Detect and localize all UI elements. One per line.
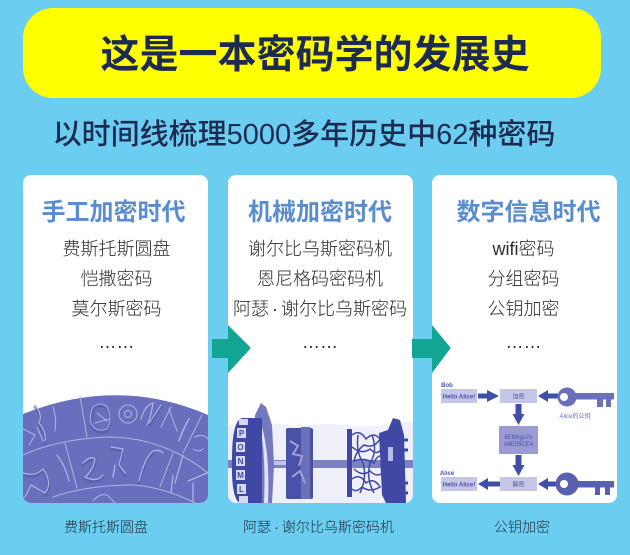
list: mechanical ciphers: 阿瑟·谢尔比乌斯密码: [233, 299, 407, 319]
diagram: public key encryption flow: Alice: [440, 471, 455, 477]
diagram: public key encryption flow: 6Ellt6gs7o: [504, 435, 533, 441]
image: Scherbius cipher machine: [228, 403, 413, 503]
image: Scherbius cipher machine: O: [237, 443, 243, 452]
list: mechanical ciphers: ……: [302, 332, 338, 352]
arrow: mechanical to digital: [412, 325, 450, 373]
caption: public key: 公钥加密: [494, 519, 550, 535]
list: manual ciphers: 莫尔斯密码: [72, 299, 162, 319]
list: digital ciphers: 公钥加密: [488, 299, 560, 319]
image: Scherbius cipher machine: P: [238, 429, 244, 438]
diagram: public key encryption flow: Bob: [441, 383, 453, 389]
list: mechanical ciphers: 谢尔比乌斯密码机: [248, 239, 392, 259]
diagram: public key encryption flow: 解密: [512, 480, 525, 488]
image: Scherbius cipher machine: L: [239, 485, 244, 494]
list: manual ciphers: ……: [98, 332, 134, 352]
diagram: public key encryption flow: [440, 382, 614, 496]
list: digital ciphers: [488, 239, 560, 352]
list: mechanical ciphers: [233, 239, 407, 352]
list: manual ciphers: 恺撒密码: [80, 269, 152, 289]
caption: Arthur Scherbius machine: 阿瑟·谢尔比乌斯密码机: [243, 519, 394, 535]
caption: Phaistos disc: 费斯托斯圆盘: [64, 519, 148, 535]
title banner: 这是一本密码学的发展史: [100, 34, 530, 77]
list: mechanical ciphers: 恩尼格码密码机: [257, 269, 383, 289]
image: Scherbius cipher machine: M: [237, 471, 244, 480]
list: digital ciphers: ……: [506, 332, 542, 352]
list: manual ciphers: 费斯托斯圆盘: [62, 239, 170, 259]
panel: digital information era: [432, 175, 617, 503]
heading: manual era: 手工加密时代: [42, 199, 186, 226]
diagram: public key encryption flow: Hello Alice!: [443, 482, 475, 488]
subtitle: 以时间线梳理5000多年历史中62种密码: [53, 119, 555, 151]
panel: mechanical encryption era: [228, 175, 412, 503]
diagram: public key encryption flow: 加密: [512, 392, 525, 400]
arrow: manual to mechanical: [212, 325, 250, 373]
diagram: public key encryption flow: Alice的公钥: [559, 412, 591, 420]
title banner: [23, 8, 601, 98]
diagram: public key encryption flow: Hello Alice!: [443, 394, 475, 400]
list: digital ciphers: wifi密码: [492, 239, 554, 259]
heading: digital era: 数字信息时代: [456, 199, 600, 226]
list: digital ciphers: 分组密码: [488, 269, 560, 289]
diagram: public key encryption flow: o8E05CE4: [504, 442, 534, 448]
heading: mechanical era: 机械加密时代: [248, 199, 392, 226]
list: manual ciphers: [62, 239, 170, 352]
image: Phaistos disc: [23, 395, 208, 503]
panel: manual encryption era: [23, 175, 208, 503]
image: Scherbius cipher machine: N: [237, 457, 243, 466]
